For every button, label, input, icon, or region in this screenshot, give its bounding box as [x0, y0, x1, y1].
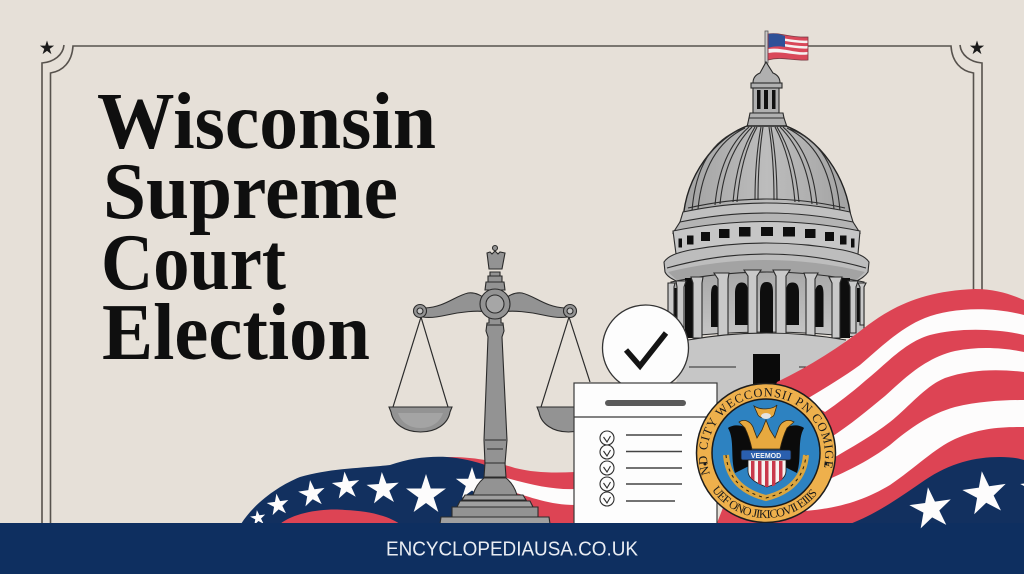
strings: [393, 317, 590, 407]
icon: check mark badge: [602, 305, 688, 391]
black bears: [728, 425, 804, 473]
red stripes: [717, 289, 1024, 523]
dome lantern: [747, 62, 787, 127]
shield banner: [741, 450, 791, 460]
seal lettering: ND CITY WECCONSII PN COMIGE: [699, 388, 834, 476]
title: Court: [101, 219, 286, 307]
flag on capitol: [765, 31, 808, 63]
beam: [423, 293, 567, 317]
title: Election: [102, 289, 370, 377]
shield banner: VEEMOD: [751, 453, 781, 460]
column: [484, 318, 507, 464]
title: Wisconsin: [97, 78, 436, 166]
gold crest: [739, 405, 794, 449]
beam end left: [414, 304, 426, 318]
seal wreath: [726, 455, 806, 498]
seal lettering: [699, 388, 834, 518]
navy field: [850, 457, 1024, 524]
title: [97, 78, 436, 377]
shield: [748, 460, 786, 487]
colonnade: [668, 270, 866, 338]
finial: [485, 246, 505, 290]
left pan: [389, 407, 452, 432]
icon: left corner star: [40, 40, 54, 54]
waving flag: left: [241, 457, 575, 525]
flag stars: right: [907, 468, 1024, 530]
right pan: [537, 407, 600, 432]
building base with door: [670, 333, 846, 420]
dome: [683, 126, 851, 220]
seal lettering: UEF ONO JIKICOVII EIIIS: [714, 485, 816, 518]
capitol building: [664, 31, 869, 420]
title: Supreme: [103, 148, 398, 236]
cornice ring: [664, 243, 869, 283]
drum with windows: [673, 203, 860, 254]
footer website text: ENCYCLOPEDIAUSA.CO.UK: [386, 538, 638, 560]
scales of justice: [389, 246, 600, 524]
wisconsin seal: [696, 382, 836, 523]
waving flag: right: [717, 289, 1024, 524]
ballot checklist: [600, 431, 682, 506]
icon: right corner star: [970, 40, 984, 54]
beam end right: [564, 304, 576, 318]
decorative frame: [42, 45, 982, 523]
ballot paper: [574, 383, 717, 524]
hub: [480, 289, 510, 319]
footer bar: [0, 523, 1024, 574]
white stripes: [805, 309, 1024, 511]
base: [440, 463, 550, 524]
